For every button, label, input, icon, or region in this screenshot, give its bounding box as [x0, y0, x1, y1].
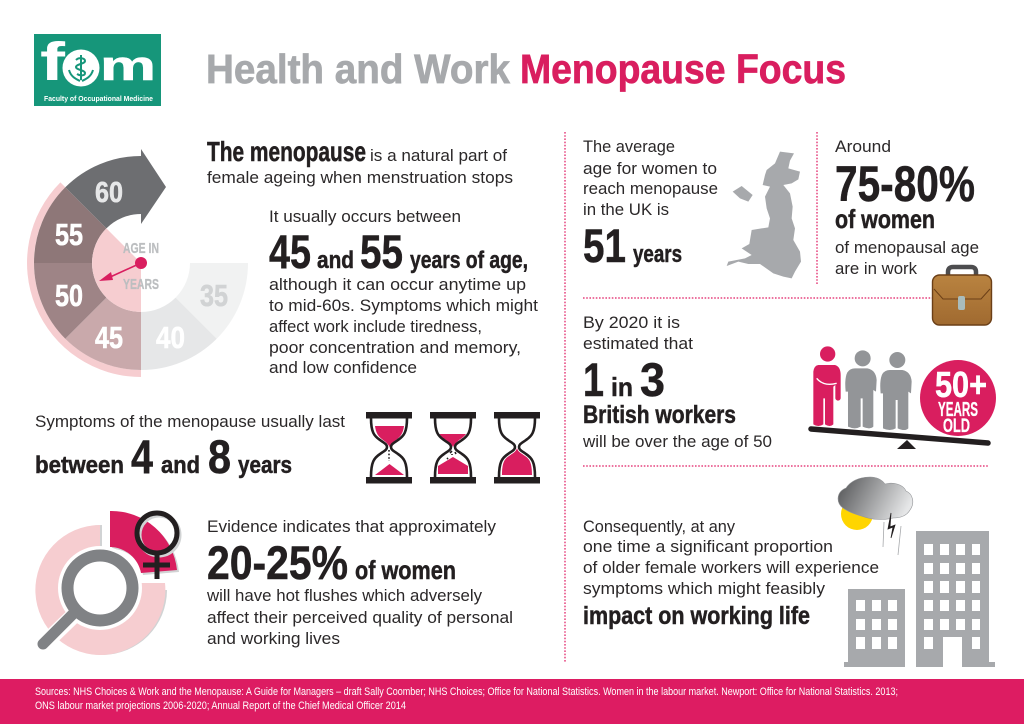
text block: average age: age for women to [583, 159, 717, 178]
age wheel chart: 45 [95, 320, 123, 355]
text block: hot flushes: will have hot flushes which adversely [206, 586, 482, 605]
icon: people on a balance with 50+ circle: 50+ [935, 364, 987, 405]
icon: storm cloud with sun [838, 477, 913, 555]
text block: symptom duration [35, 412, 345, 483]
text block: women in work [835, 137, 979, 278]
icon: magnifier and female symbol [35, 511, 179, 655]
logo: Faculty of Occupational Medicine: f [40, 32, 66, 92]
text block: women in work: Around [835, 137, 891, 156]
text block: average age: The average [583, 137, 675, 156]
text block: what the menopause is: The menopause [207, 136, 366, 167]
text block: impact on working life: symptoms which might feasibly [583, 579, 826, 598]
text block: usual age range: poor concentration and memory, [269, 338, 521, 357]
text block: usual age range: 45 [269, 225, 311, 278]
age wheel chart: 40 [156, 320, 185, 355]
text block: symptom duration: between [35, 452, 124, 479]
text block: impact on working life: impact on working life [583, 602, 810, 630]
icon: briefcase [932, 267, 992, 325]
footer: sources [0, 679, 1024, 724]
text block: what the menopause is [207, 136, 513, 187]
text block: women in work: of women [835, 204, 935, 234]
text block: average age: reach menopause [583, 179, 718, 198]
logo: Faculty of Occupational Medicine [34, 32, 161, 106]
text block: impact on working life: one time a significant proportion [583, 537, 833, 556]
text block: symptom duration: years [238, 452, 292, 479]
text block: 1 in 3 workers: By 2020 it is [583, 313, 680, 332]
text block: average age: 51 [583, 219, 626, 272]
text block: hot flushes: 20-25% [207, 536, 348, 589]
age wheel chart: YEARS [123, 276, 159, 293]
text block: symptom duration: 8 [208, 430, 231, 483]
text block: women in work: are in work [835, 259, 917, 278]
footer: sources: ONS labour market projections 2006-2020; Annual Report of the Chief Medical Officer 2014 [35, 700, 406, 712]
text block: symptom duration: 4 [131, 430, 153, 483]
text block: 1 in 3 workers: in [611, 372, 633, 402]
text block: hot flushes: affect their perceived quality of personal [207, 608, 513, 627]
text block: hot flushes: Evidence indicates that approximately [207, 517, 496, 536]
text block: 1 in 3 workers: 3 [640, 353, 665, 406]
age wheel chart: AGE IN [123, 240, 159, 257]
text block: what the menopause is: female ageing when menstruation stops [207, 168, 513, 187]
text block: impact on working life: Consequently, at any [583, 517, 735, 536]
text block: symptom duration: Symptoms of the menopause usually last [35, 412, 345, 431]
text block: 1 in 3 workers [582, 313, 772, 451]
icon: hourglass 3 [494, 412, 540, 484]
text block: women in work: of menopausal age [835, 238, 979, 257]
text block: impact on working life: of older female workers will experience [583, 558, 879, 577]
age wheel chart [27, 149, 248, 377]
text block: usual age range: to mid-60s. Symptoms which might [269, 296, 538, 315]
text block: hot flushes [206, 517, 513, 648]
text block: what the menopause is: is a natural part of [370, 146, 507, 165]
text block: 1 in 3 workers: estimated that [583, 334, 693, 353]
age wheel chart: 55 [55, 217, 83, 252]
text block: symptom duration: and [161, 452, 200, 479]
age wheel chart: 60 [95, 177, 123, 209]
text block: usual age range: and low confidence [269, 358, 417, 377]
text block: hot flushes: and working lives [207, 629, 340, 648]
text block: hot flushes: of women [355, 555, 456, 585]
text block: 1 in 3 workers: British workers [583, 401, 736, 429]
age wheel chart: 50 [55, 278, 83, 313]
text block: usual age range: years of age, [410, 247, 528, 274]
text block: usual age range [269, 207, 538, 377]
text block: impact on working life [583, 517, 879, 630]
text block: usual age range: 55 [360, 225, 403, 278]
title [206, 46, 846, 92]
icon: hourglass 2 [430, 412, 476, 484]
text block: usual age range: and [317, 247, 354, 274]
icon: UK map [727, 152, 801, 278]
text block: 1 in 3 workers: 1 [583, 353, 604, 406]
icon: office buildings [844, 531, 995, 667]
text block: usual age range: It usually occurs between [269, 207, 461, 226]
logo: Faculty of Occupational Medicine: m [100, 42, 156, 89]
title: Health and Work [206, 46, 510, 92]
text block: usual age range: affect work include tiredness, [269, 317, 482, 336]
text block: women in work: 75-80% [835, 156, 975, 212]
text block: average age: in the UK is [583, 200, 669, 219]
icon: hourglass 1 [366, 412, 412, 484]
title: Menopause Focus [520, 46, 846, 92]
icon: people on a balance with 50+ circle: OLD [943, 416, 970, 437]
text block: average age [583, 137, 718, 272]
text block: usual age range: although it can occur anytime up [269, 275, 526, 294]
icon: people on a balance with 50+ circle [811, 346, 996, 449]
text block: average age: years [633, 241, 682, 268]
age wheel chart: 35 [200, 278, 228, 313]
text block: 1 in 3 workers: will be over the age of 50 [582, 432, 772, 451]
icon: people on a balance with 50+ circle: YEARS [938, 399, 978, 421]
logo: Faculty of Occupational Medicine: Faculty of Occupational Medicine [44, 94, 153, 103]
